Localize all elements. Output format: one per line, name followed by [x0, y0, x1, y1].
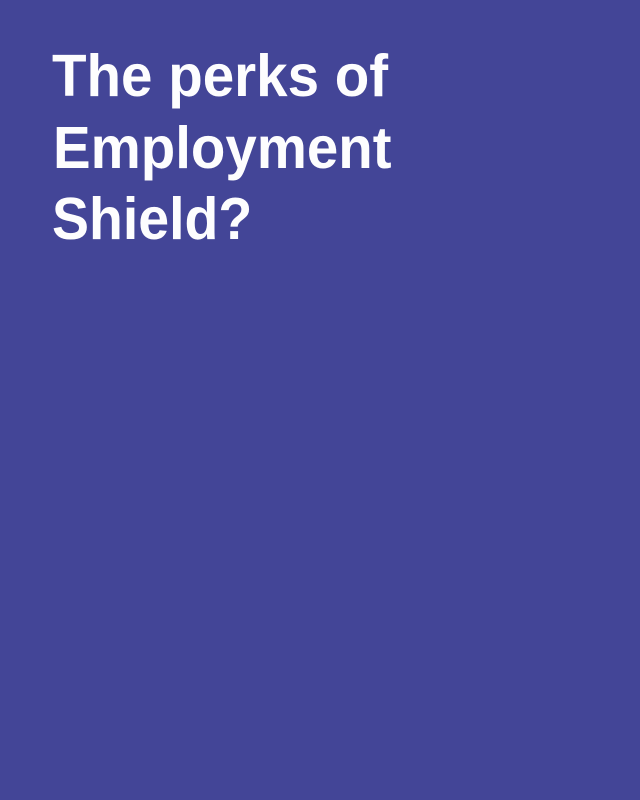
title: The perks of [52, 43, 388, 109]
title: Employment [53, 114, 391, 180]
title: Shield? [52, 186, 252, 252]
title [52, 43, 391, 252]
